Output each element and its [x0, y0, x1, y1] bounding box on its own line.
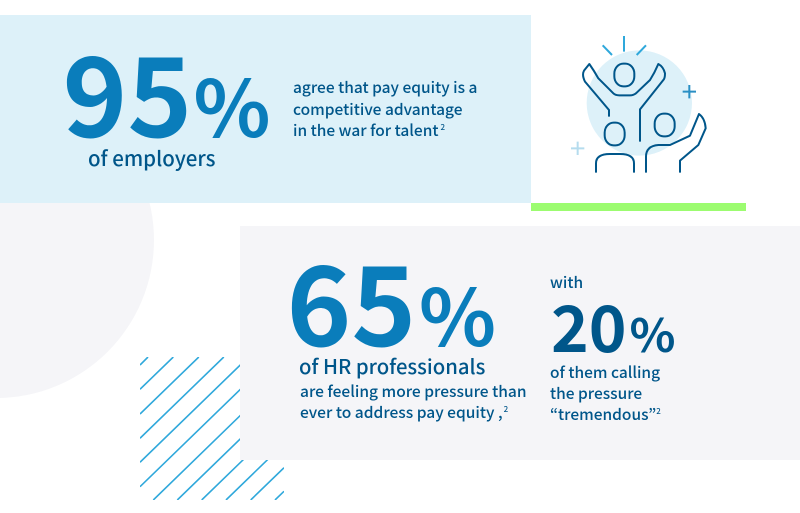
text: agree that pay equity: agree that pay equity is a — [293, 76, 477, 98]
stat: 65% — [286, 218, 496, 378]
text: in the war for talent: 2 — [440, 122, 446, 133]
text: are feeling more pressure: are feeling more pressure than — [300, 380, 527, 402]
icon: celebrating people — [571, 36, 706, 173]
text: ever to address pay equity: ever to address pay equity , — [300, 401, 503, 423]
stat: 95%: % — [194, 48, 270, 160]
stat: 65%: % — [419, 257, 496, 369]
label: of HR professionals: of HR professionals — [299, 350, 486, 380]
text: competitive advantage: competitive advantage — [293, 98, 463, 120]
accent green bar — [531, 203, 746, 211]
label: of employers: of employers — [88, 142, 216, 172]
stat: 95%: 95 — [62, 9, 192, 169]
decorative grey circle — [0, 82, 154, 398]
hatched square — [140, 357, 284, 500]
stat: 95% — [62, 9, 270, 169]
text: the pressure: the pressure — [550, 382, 642, 404]
text: tremendous: “tremendous” — [550, 403, 656, 425]
text: tremendous: 2 — [656, 406, 661, 417]
stat: 20%: 20 — [551, 279, 627, 371]
stat: 20%: % — [630, 300, 676, 366]
panel: 95 percent of employers — [0, 9, 531, 203]
panel: 65 percent of HR professionals — [240, 218, 800, 460]
text: ever to address pay equity: 2 — [504, 404, 509, 415]
label: with: with — [550, 271, 583, 293]
text: of them calling: of them calling — [550, 361, 660, 383]
text: in the war for talent: in the war for talent — [293, 119, 438, 141]
stat: 65%: 65 — [286, 218, 416, 378]
stat: 20% — [551, 279, 676, 371]
